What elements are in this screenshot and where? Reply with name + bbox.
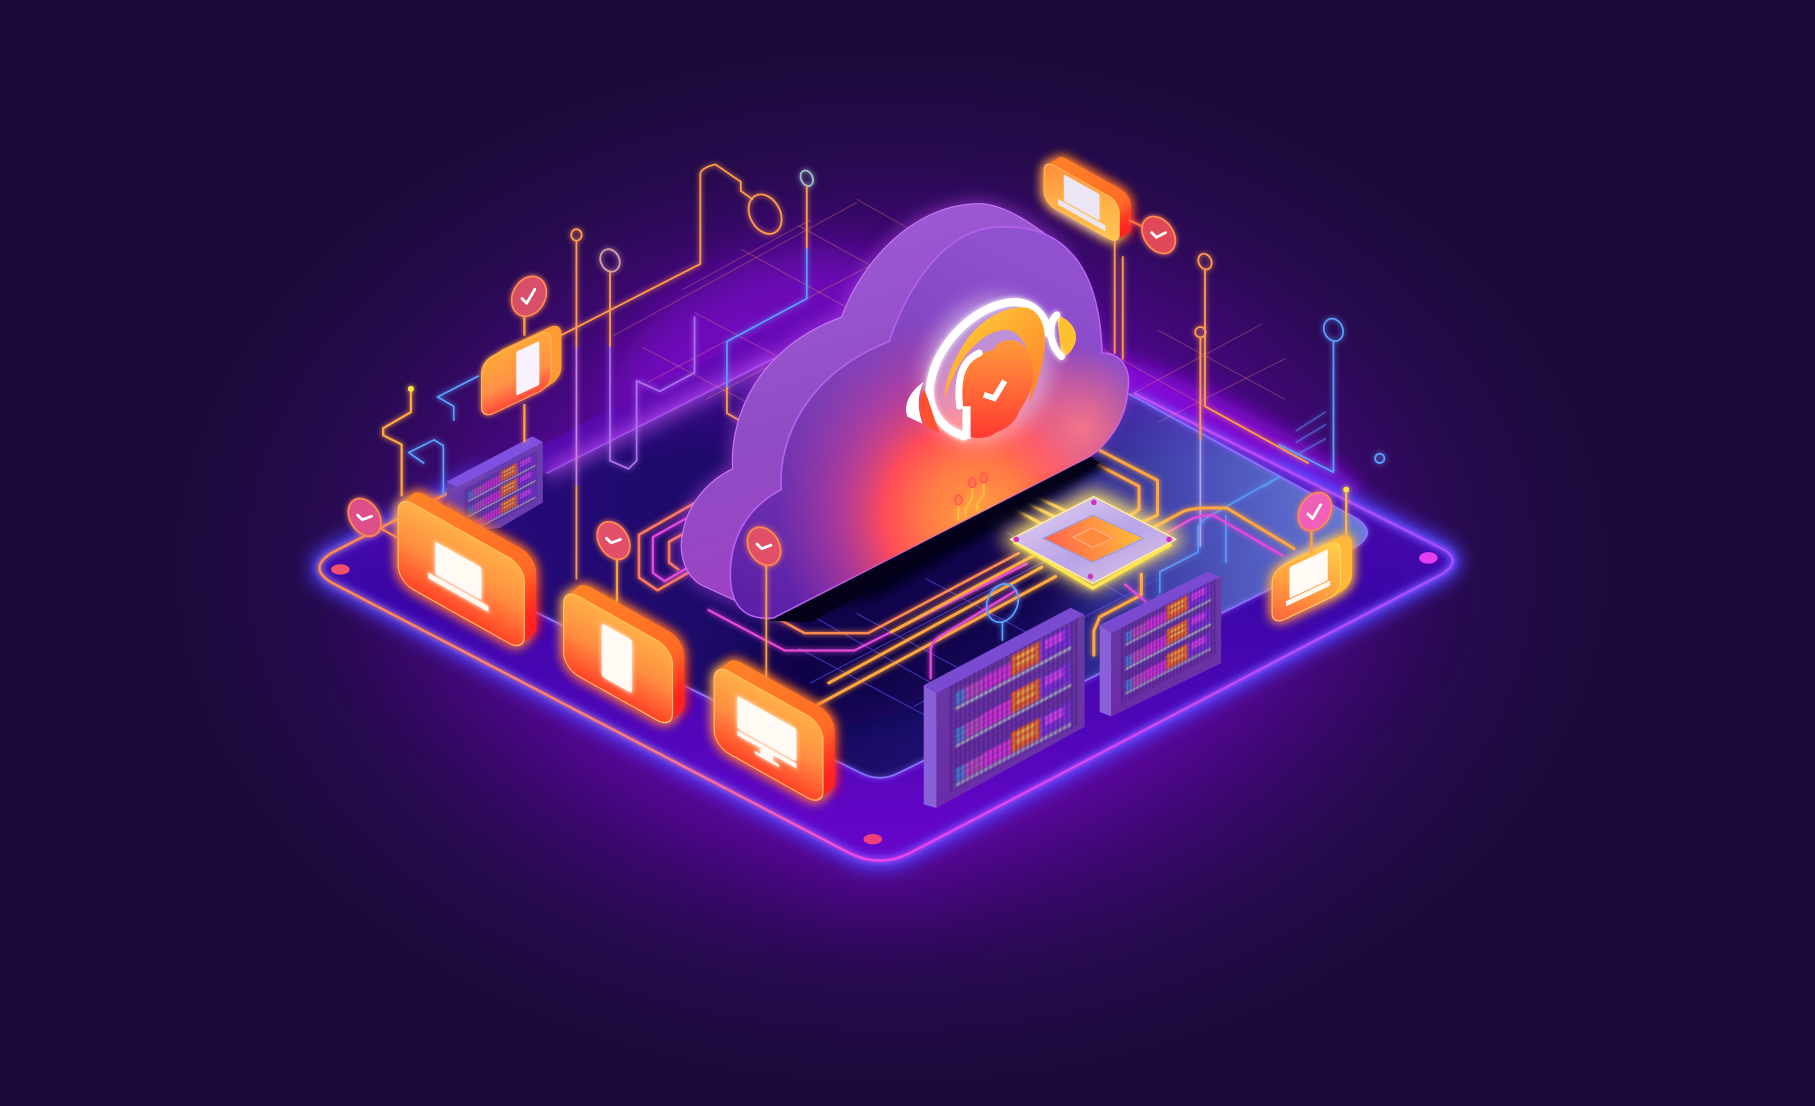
trace with large ring (560, 164, 788, 336)
check badge: upper right laptop (1129, 210, 1182, 260)
blue traces right of chip (1160, 477, 1279, 593)
traces to racks (1094, 574, 1141, 655)
cloud (681, 204, 1134, 625)
panel: isometric platform (319, 276, 1453, 861)
circuit traces on the plate (639, 449, 1294, 705)
icon: cloud check emblem (898, 275, 1076, 466)
trace below upper device (1115, 241, 1123, 359)
icon: small laptop (1058, 171, 1105, 231)
blue trace with ring (1279, 315, 1347, 472)
cloud front face (718, 220, 1134, 625)
corner mount hole: right (1419, 552, 1438, 564)
medium server rack (1100, 572, 1221, 716)
circuit line from chip to medium rack (1158, 596, 1160, 613)
large server rack (924, 608, 1085, 808)
check badge: desktop (741, 521, 787, 677)
icon: small white laptop (1286, 548, 1330, 606)
right device pin with yellow dot (1343, 487, 1349, 544)
icon: small phone (516, 341, 539, 396)
corner mount hole: left (331, 564, 350, 575)
left hex traces (639, 502, 696, 590)
cloud shadow on plate (773, 456, 1109, 620)
lilac trace with small ring (1195, 327, 1206, 546)
icon: phone (602, 623, 632, 693)
orange trace with ring (1196, 252, 1308, 463)
cloud side extrusion (681, 204, 1076, 618)
icon: desktop monitor (737, 696, 796, 777)
device: laptop panel, upper right (1044, 153, 1131, 245)
check badge: left laptop (342, 493, 398, 542)
device: phone panel, centre (564, 579, 684, 729)
traces to right device (1153, 508, 1294, 549)
chip corner pins (1014, 500, 1172, 579)
medium rack rows (1120, 575, 1216, 705)
ring above rack (981, 579, 1024, 640)
check badge: right laptop (1292, 487, 1338, 553)
cloud circuit pins (955, 473, 987, 521)
check badge: upper left phone (505, 270, 553, 336)
small server rack, back left (447, 436, 543, 539)
traces from cloud to chip (1002, 491, 1072, 528)
long vertical trace (571, 229, 582, 579)
device: laptop panel, left (398, 486, 536, 652)
traces from chip to the lower left (769, 553, 1019, 633)
check badge: centre phone (590, 516, 636, 602)
device: desktop panel, centre right (714, 654, 835, 806)
left blue brackets (409, 376, 478, 495)
processor chip (1011, 497, 1176, 588)
panel: glass inner plate (488, 347, 1371, 782)
cloud glow (681, 204, 1127, 618)
circuit lines: upper left (383, 164, 815, 579)
hairpin trace with ring (597, 246, 695, 469)
device: phone panel, upper left (482, 322, 561, 442)
corner mount hole: bottom (864, 834, 882, 844)
small blue node (1375, 454, 1384, 463)
left orange trace with yellow dot (383, 386, 414, 495)
chip die (1043, 515, 1144, 563)
large rack rows (948, 614, 1078, 794)
device: laptop panel, right (1272, 531, 1352, 625)
icon: laptop (428, 538, 488, 612)
circuit lines: upper right (1115, 241, 1384, 593)
trace with small teal ring (727, 168, 815, 422)
background isometric grid (613, 199, 1296, 752)
